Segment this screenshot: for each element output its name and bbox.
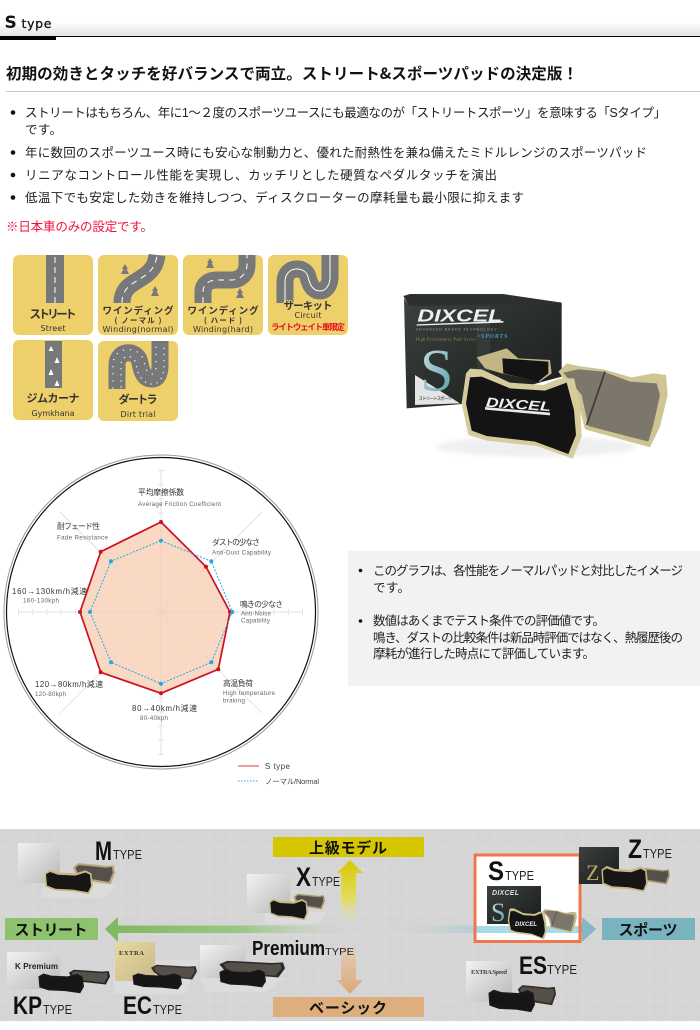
product: ES type (466, 952, 577, 1012)
product: X type: TYPE (312, 874, 340, 889)
axis labels: 80→40km/h減速 (132, 703, 197, 713)
note panel: 数値はあくまでテスト条件での評価値です。 (373, 613, 605, 628)
product photo: S type box and brake pads (403, 294, 668, 459)
label: sports (602, 918, 695, 940)
axis labels: Average Friction Coefficient (138, 501, 221, 508)
icon: dirt trial: ダートラ (118, 391, 158, 407)
label: sports: スポーツ (618, 919, 678, 940)
arrow: to street (105, 917, 360, 942)
bullet list: 低温下でも安定した効きを維持しつつ、ディスクローターの摩耗量も最小限に抑えます (25, 190, 524, 205)
highlight box: S type (475, 855, 580, 942)
product: ES type: EXTRA Speed (471, 969, 507, 976)
box (403, 294, 562, 408)
axis labels: ダストの少なさ (212, 537, 260, 547)
icon: dirt trial: Dirt trial (120, 410, 156, 419)
note panel: 摩耗が進行した時点にて評価しています。 (373, 646, 595, 661)
axis labels (12, 487, 283, 722)
axis labels: 160→130km/h減速 (12, 586, 87, 596)
icon: dirt trial (98, 341, 178, 421)
axis labels: 120-80kph (35, 691, 67, 698)
product: EC type: EC (123, 992, 152, 1020)
product photo: S type box and brake pads: DIXCEL (485, 395, 551, 414)
product: EC type: EXTRA (119, 950, 144, 957)
product: Z type: TYPE (643, 846, 672, 861)
highlight box: S type: S (491, 898, 505, 927)
icon: circuit: ライトウェイト車限定 (271, 321, 345, 333)
axis labels: 160-130kph (23, 598, 60, 604)
axis labels: 80-40kph (140, 715, 169, 722)
note panel (348, 551, 700, 686)
label: street: ストリート (14, 919, 88, 940)
chart rings (4, 455, 318, 769)
radar chart (4, 455, 319, 786)
product: Z type (579, 834, 672, 892)
label: upper model: 上級モデル (309, 837, 387, 858)
box: DIXCEL (417, 306, 502, 326)
arrow: vertical up (337, 860, 363, 925)
product: KP type: TYPE (43, 1002, 72, 1017)
label: basic (273, 997, 424, 1018)
icon: winding hard: ( ハード ) (204, 315, 242, 326)
bullet list (11, 105, 666, 205)
box: High Performance Pads Series (416, 337, 476, 342)
axis labels: Anti-Dust Capability (212, 550, 272, 556)
product: ES type: ES (519, 952, 547, 980)
bullet list: です。 (25, 123, 62, 137)
axis labels: 高温負荷 (223, 678, 253, 688)
product: M type: M (95, 836, 112, 866)
S type polygon (80, 522, 230, 693)
axis labels: Fade Resistance (57, 534, 109, 542)
product: Z type: Z (628, 834, 642, 864)
highlight box: S type: TYPE (505, 868, 534, 883)
product: ES type: TYPE (547, 962, 577, 977)
icon: winding normal: ( ノーマル ) (114, 315, 162, 326)
axis labels: 平均摩擦係数 (138, 487, 184, 497)
axis labels: High temperature (223, 690, 276, 697)
axis labels: 120→80km/h減速 (35, 679, 103, 689)
icon: winding hard: Winding(hard) (193, 325, 253, 334)
product: EC type (114, 942, 200, 1020)
product: M type: TYPE (113, 847, 142, 862)
legend (238, 762, 319, 786)
icon: gymkhana (13, 340, 93, 420)
icon: circuit: サーキット (284, 298, 332, 313)
heading: 初期の効きとタッチを好バランスで両立。ストリート&スポーツパッドの決定版！ (6, 62, 578, 84)
note panel: このグラフは、各性能をノーマルパッドと対比したイメージ (373, 563, 683, 578)
normal points (88, 539, 234, 686)
product: EC type: TYPE (153, 1002, 182, 1017)
axis labels: 耐フェード性 (57, 521, 100, 531)
icon: street (13, 255, 93, 335)
box: S (420, 338, 453, 404)
product: Premium type (200, 938, 354, 992)
icon: street: ストリート (30, 306, 76, 322)
section header: S type: type (22, 16, 52, 31)
legend: ノーマル/Normal (265, 777, 319, 786)
note panel: です。 (373, 581, 410, 595)
highlight box: S type: S (488, 856, 504, 886)
box: ストリートスポーツ (419, 395, 452, 402)
note panel: 鳴き、ダストの比較条件は新品時評価ではなく、熱履歴後の (373, 630, 683, 645)
highlight box: S type: DIXCEL (492, 890, 519, 897)
bullet list: 年に数回のスポーツユース時にも安心な制動力と、優れた耐熱性を兼ね備えたミドルレンジのスポーツパッド (25, 145, 647, 160)
arrow: vertical down (337, 935, 363, 994)
lineup map panel (0, 829, 700, 1021)
product: X type: X (296, 862, 311, 892)
icon: street: Street (40, 324, 66, 333)
axis labels: braking (223, 698, 246, 704)
icon: winding hard: ワインディング (188, 303, 259, 317)
bullet list: リニアなコントロール性能を実現し、カッチリとした硬質なペダルタッチを演出 (25, 168, 497, 182)
product: KP type: KP (13, 992, 42, 1020)
normal polygon (90, 541, 232, 684)
legend: S type (265, 762, 291, 771)
arrow: to sports (383, 917, 596, 942)
axis labels: 鳴きの少なさ (240, 599, 283, 609)
icon: winding normal (98, 255, 178, 335)
front pad (462, 369, 582, 459)
product: Z type: Z (586, 860, 599, 885)
icon: gymkhana: ジムカーナ (26, 390, 80, 406)
bullet list: ストリートはもちろん、年に1～２度のスポーツユースにも最適なのが「ストリートスポーツ」を意味する「Sタイプ」 (25, 105, 666, 120)
icon: winding hard (183, 255, 263, 335)
icon: winding normal: ワインディング (102, 303, 174, 317)
label: upper model (273, 837, 424, 858)
product: KP type (7, 952, 110, 1020)
highlight box: S type: DIXCEL (515, 922, 537, 928)
section header: S type (0, 13, 700, 40)
product: X type (247, 862, 340, 924)
box: >SPORTS (477, 334, 508, 340)
icon: circuit (268, 255, 348, 335)
product: KP type: K Premium (15, 962, 58, 971)
icon: winding normal: Winding(normal) (102, 325, 174, 334)
product: Premium type: Premium (252, 938, 325, 960)
icon: circuit: Circuit (294, 311, 322, 320)
section header: S type: S (4, 13, 17, 33)
icon: gymkhana: Gymkhana (32, 409, 75, 418)
small pad (477, 348, 552, 382)
label: basic: ベーシック (309, 997, 387, 1018)
product: Premium type: TYPE (325, 947, 354, 958)
axis labels: Anti-Noise (241, 610, 272, 618)
axis labels: Capability (241, 618, 271, 624)
box: ADVANCED BRAKE TECHNOLOGY (416, 328, 497, 332)
note: Japanese cars only: ※日本車のみの設定です。 (6, 220, 153, 234)
S type points (78, 520, 232, 695)
rear pad (558, 363, 668, 447)
product: M type (18, 836, 142, 898)
